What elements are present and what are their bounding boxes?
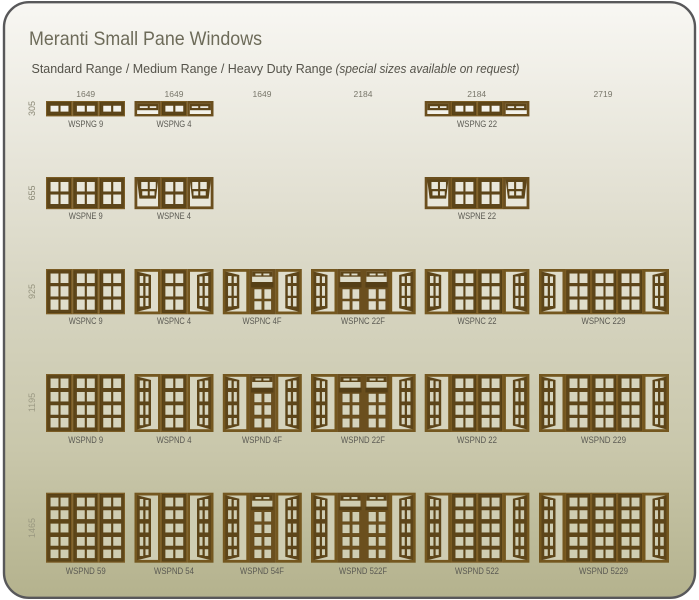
window WSPND 5229 — [539, 493, 669, 563]
window WSPND 522F — [311, 493, 416, 563]
label WSPNC 229: WSPNC 229 — [582, 316, 626, 326]
label WSPND 4: WSPND 4 — [156, 435, 192, 445]
subtitle note: (special sizes available on request) — [336, 61, 520, 76]
width dimensions: 1649 — [253, 89, 272, 99]
label WSPND 59: WSPND 59 — [66, 566, 106, 576]
label WSPNG 9: WSPNG 9 — [68, 119, 103, 129]
row: 1465 high — [46, 493, 669, 576]
label WSPND 54: WSPND 54 — [154, 566, 194, 576]
height dimension 925: 925 — [27, 284, 37, 299]
label WSPNC 4: WSPNC 4 — [157, 316, 191, 326]
width dimensions: 2719 — [594, 89, 613, 99]
label WSPND 22F: WSPND 22F — [341, 435, 385, 445]
label WSPND 229: WSPND 229 — [581, 435, 626, 445]
window WSPND 22 — [425, 374, 529, 432]
width dimensions — [76, 89, 613, 99]
subtitle: ranges: Standard Range / Medium Range / Heavy Duty Range — [32, 61, 332, 76]
label WSPNC 22: WSPNC 22 — [458, 316, 496, 326]
width dimensions: 1649 — [76, 89, 95, 99]
window WSPNE 4 — [134, 177, 214, 209]
label WSPND 4F: WSPND 4F — [242, 435, 282, 445]
label WSPND 22: WSPND 22 — [457, 435, 497, 445]
window WSPNG 22 — [425, 101, 529, 116]
window WSPND 22F — [311, 374, 416, 432]
window WSPND 54 — [134, 493, 214, 563]
window WSPNC 229 — [539, 269, 669, 314]
window WSPND 59 — [46, 493, 125, 563]
height dimension 655: 655 — [27, 185, 37, 201]
label WSPND 522F: WSPND 522F — [339, 566, 387, 576]
label WSPND 54F: WSPND 54F — [240, 566, 284, 576]
window WSPND 229 — [539, 374, 669, 432]
window WSPNE 22 — [425, 177, 529, 209]
row: 925 high — [46, 269, 669, 326]
label WSPNE 4: WSPNE 4 — [157, 211, 191, 221]
label WSPND 522: WSPND 522 — [455, 566, 499, 576]
window WSPND 4F — [223, 374, 302, 432]
label WSPNC 4F: WSPNC 4F — [242, 316, 282, 326]
height dimension 305: 305 — [27, 101, 37, 116]
window WSPND 9 — [46, 374, 125, 432]
label WSPND 5229: WSPND 5229 — [579, 566, 628, 576]
width dimensions: 2184 — [467, 89, 486, 99]
window WSPNG 4 — [134, 101, 214, 116]
window WSPNG 9 — [46, 101, 125, 116]
width dimensions: 1649 — [165, 89, 184, 99]
label WSPND 9: WSPND 9 — [68, 435, 103, 445]
label WSPNG 4: WSPNG 4 — [156, 119, 192, 129]
height dimension 1465: 1465 — [27, 518, 37, 538]
window WSPNC 9 — [46, 269, 125, 314]
label WSPNE 22: WSPNE 22 — [458, 211, 496, 221]
height dimension 1195: 1195 — [27, 393, 37, 412]
window WSPNC 4F — [223, 269, 302, 314]
window WSPNC 4 — [134, 269, 214, 314]
window WSPND 522 — [425, 493, 529, 563]
row: 305 high — [46, 101, 529, 129]
window WSPNE 9 — [46, 177, 125, 209]
width dimensions: 2184 — [354, 89, 373, 99]
title: Meranti Small Pane Windows — [29, 28, 262, 50]
window WSPNC 22 — [425, 269, 529, 314]
row: 655 high — [46, 177, 529, 221]
label WSPNG 22: WSPNG 22 — [457, 119, 497, 129]
window WSPND 4 — [134, 374, 214, 432]
row: 1195 high — [46, 374, 669, 445]
label WSPNC 9: WSPNC 9 — [69, 316, 103, 326]
label WSPNC 22F: WSPNC 22F — [341, 316, 385, 326]
label WSPNE 9: WSPNE 9 — [69, 211, 103, 221]
window WSPND 54F — [223, 493, 302, 563]
window WSPNC 22F — [311, 269, 416, 314]
